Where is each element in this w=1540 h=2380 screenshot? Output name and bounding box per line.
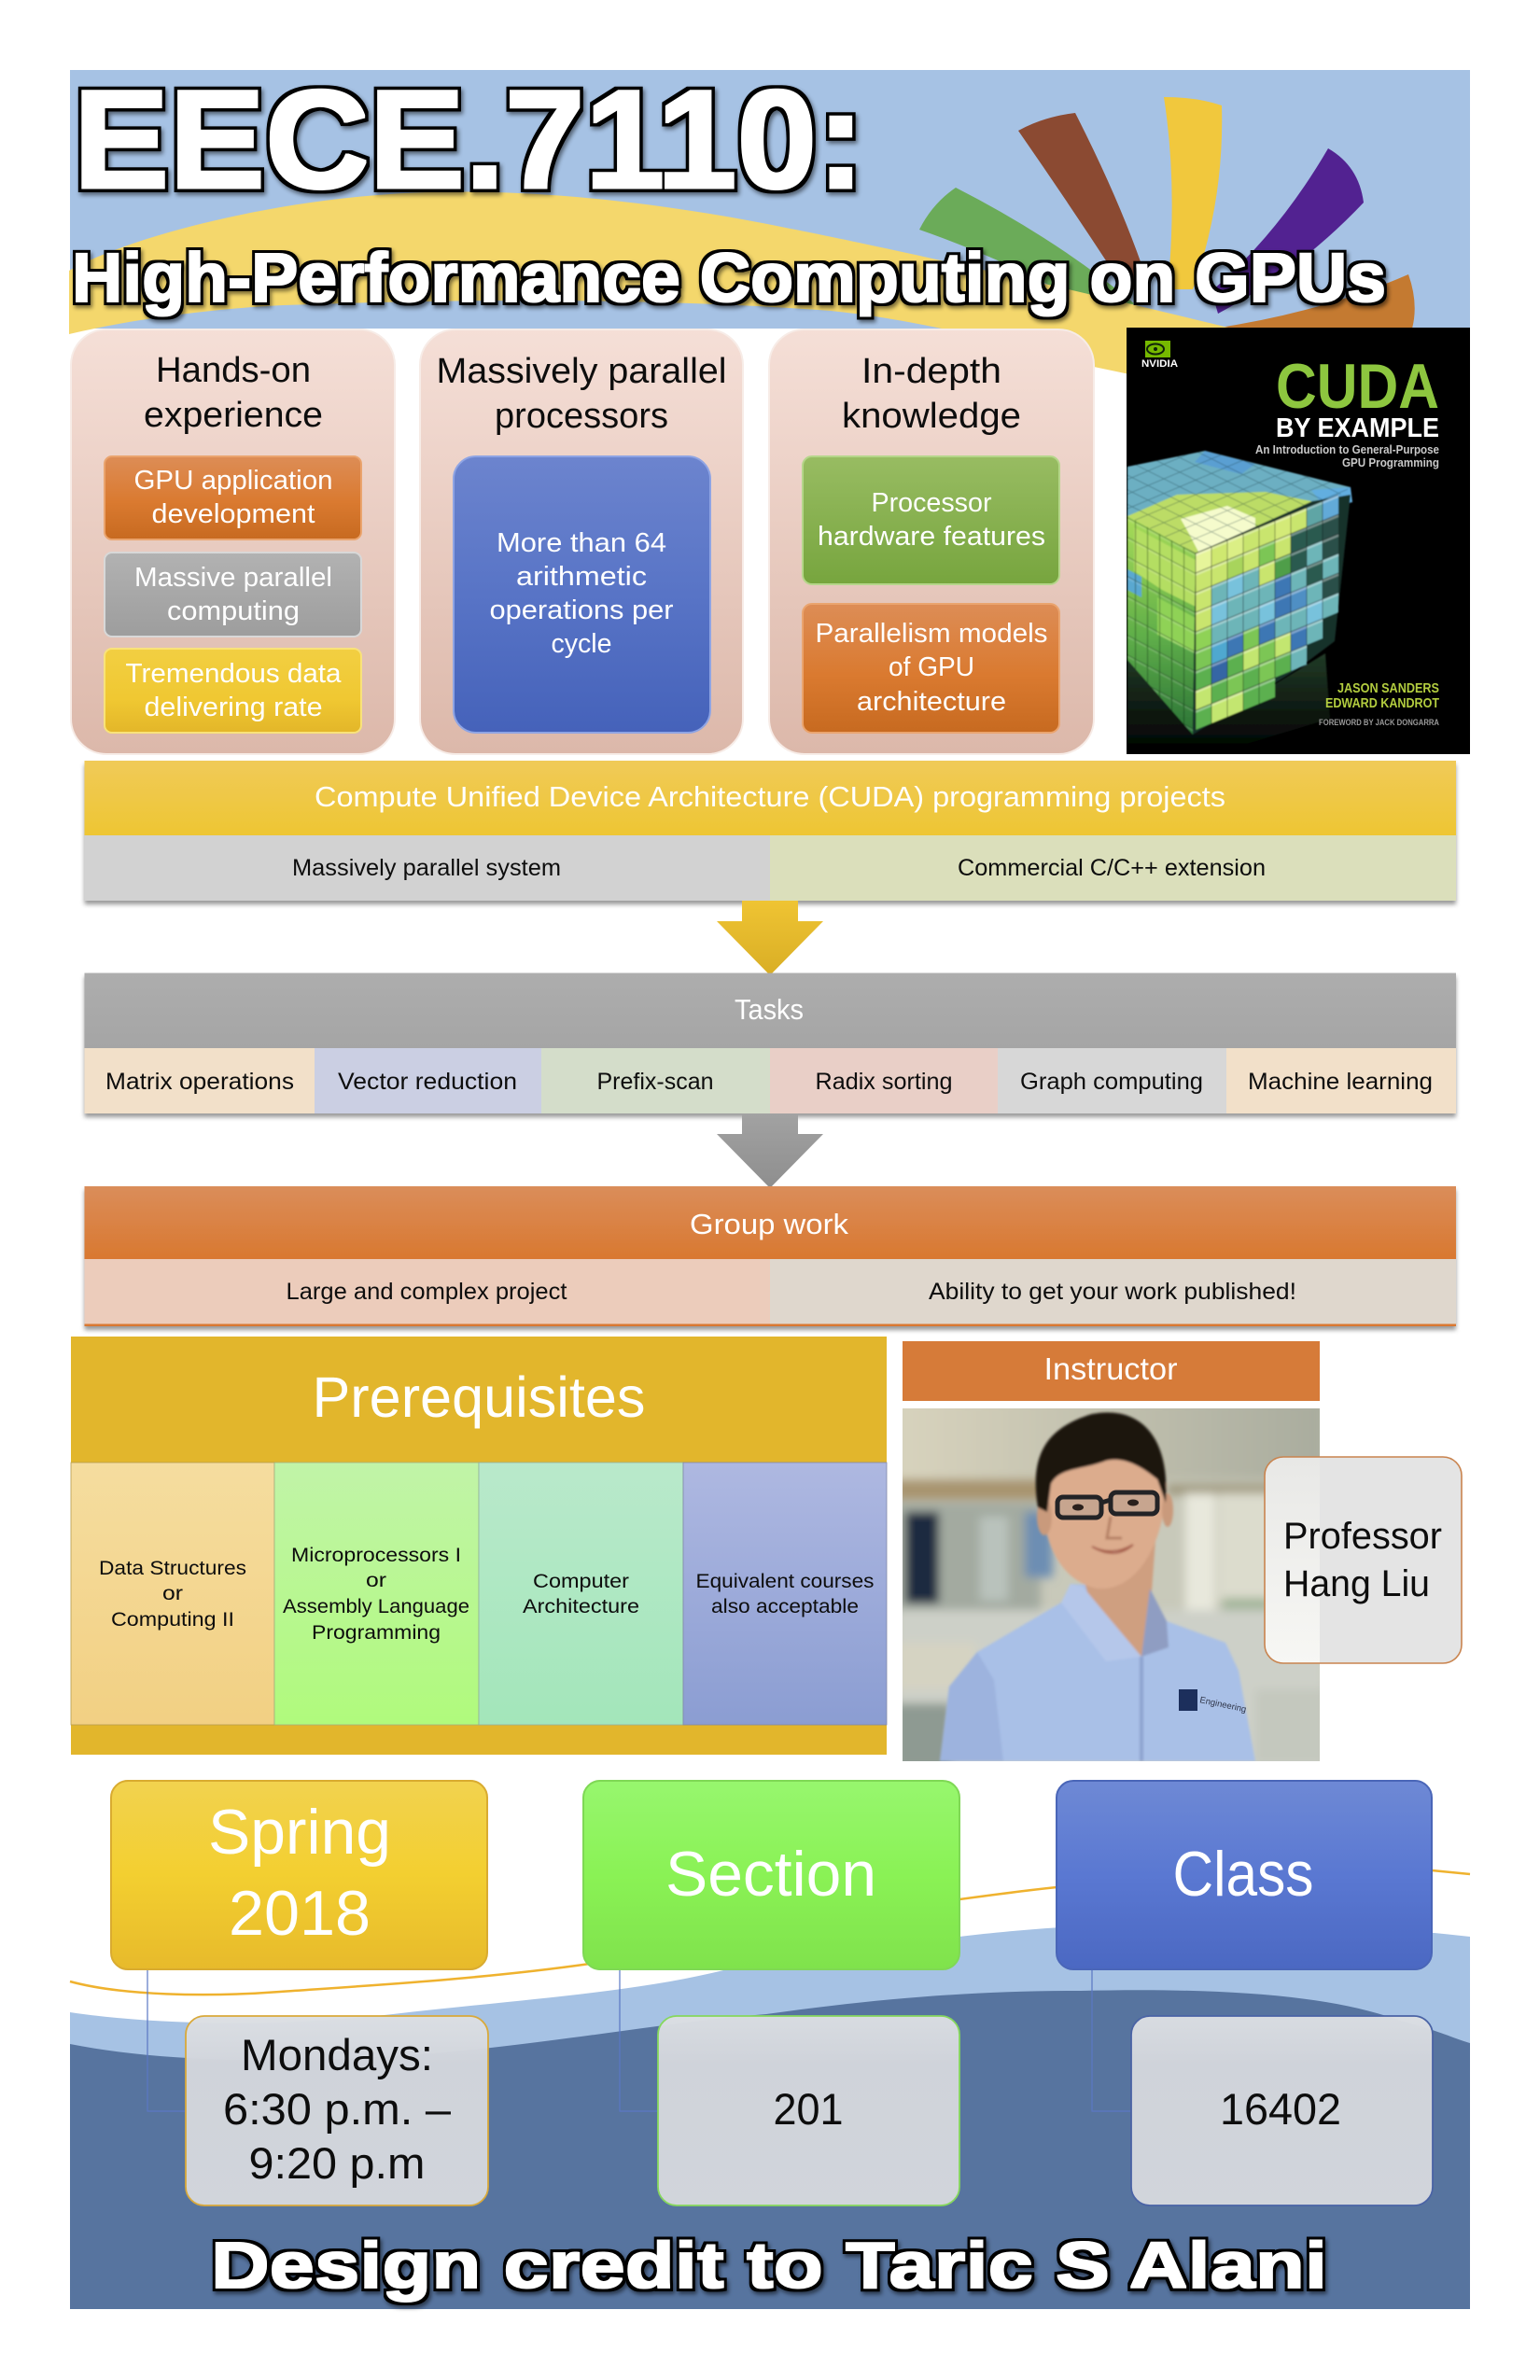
cell: equivalent courses also acceptable <box>683 1463 887 1725</box>
glasses <box>1057 1492 1157 1518</box>
arrow: to tasks <box>717 901 823 975</box>
box: more than 64 arithmetic operations: operations per <box>489 595 674 625</box>
petal: orange <box>1213 274 1415 329</box>
band: CUDA programming projects: Commercial C/C++ extension <box>958 855 1266 881</box>
box: section <box>583 1781 959 1969</box>
book authors: FOREWORD BY JACK DONGARRA <box>1319 718 1439 727</box>
cell: computer architecture: Architecture <box>523 1595 639 1617</box>
box: meeting time: Mondays: <box>241 2030 433 2079</box>
shirt logo <box>1179 1689 1247 1715</box>
box: massive parallel computing: Massive parallel <box>134 563 332 593</box>
panel: prerequisites <box>71 1337 887 1755</box>
box: class <box>1057 1781 1432 1969</box>
book title: GPU Programming <box>1342 455 1439 469</box>
box: section number: 201 <box>773 2084 844 2134</box>
box: parallelism models of GPU architecture <box>803 604 1059 733</box>
box: parallelism models of GPU architecture: architecture <box>857 687 1006 717</box>
book title: BY EXAMPLE <box>1276 413 1439 443</box>
heading: massively parallel processors: processors <box>495 397 668 436</box>
box: massive parallel computing <box>105 553 361 637</box>
cell: microprocessors I or assembly language programming: Programming <box>312 1621 441 1644</box>
box: more than 64 arithmetic operations: arithmetic <box>516 562 647 592</box>
main title: EECE.7110: <box>73 61 865 217</box>
box: section: Section <box>665 1839 876 1910</box>
instructor heading <box>903 1341 1320 1401</box>
box: class number <box>1131 2016 1433 2205</box>
top header background <box>69 70 1470 375</box>
band: group work: Group work <box>690 1208 849 1240</box>
heading: massively parallel processors: Massively parallel <box>437 352 726 391</box>
cell: computer architecture <box>479 1463 683 1725</box>
heading: hands-on experience <box>144 351 323 435</box>
box: processor hardware features: hardware features <box>818 522 1045 552</box>
shirt logo: Engineering <box>1198 1695 1247 1715</box>
book authors: EDWARD KANDROT <box>1325 695 1439 711</box>
band: tasks: Graph computing <box>1020 1069 1203 1095</box>
heading: hands-on experience: experience <box>144 396 323 435</box>
book cover: CUDA by Example <box>1127 328 1470 754</box>
bottom wave background <box>70 1870 1470 2309</box>
box: tremendous data delivering rate: Tremendous data <box>125 659 342 689</box>
box: more than 64 arithmetic operations <box>454 456 710 733</box>
cell: data structures or computing II: Data Structures <box>99 1557 246 1579</box>
book title <box>1255 351 1439 469</box>
book title: CUDA <box>1276 351 1439 422</box>
heading: in-depth knowledge <box>842 352 1021 436</box>
heading: in-depth knowledge: In-depth <box>861 352 1001 391</box>
band: CUDA programming projects <box>84 761 1456 901</box>
yellow wave <box>69 192 1232 375</box>
band: tasks: Radix sorting <box>816 1069 952 1095</box>
box: meeting time: 9:20 p.m <box>248 2138 426 2188</box>
instructor photo <box>896 1400 1325 1769</box>
icon: NVIDIA logo <box>1141 341 1178 370</box>
panel: in-depth knowledge <box>769 329 1094 754</box>
book authors: JASON SANDERS <box>1337 680 1439 696</box>
box: spring 2018 <box>111 1781 487 1969</box>
book authors <box>1319 680 1439 727</box>
band: group work: Large and complex project <box>286 1279 567 1305</box>
cell: microprocessors I or assembly language programming: or <box>366 1569 386 1591</box>
band: tasks: Vector reduction <box>338 1069 517 1095</box>
heading: prerequisites: Prerequisites <box>312 1365 646 1429</box>
cell: equivalent courses also acceptable: also acceptable <box>711 1595 859 1617</box>
box: processor hardware features <box>803 456 1059 584</box>
professor name card <box>1265 1457 1462 1663</box>
box: more than 64 arithmetic operations: cycle <box>551 629 612 659</box>
design credit: Design credit to Taric S Alani <box>211 2229 1327 2302</box>
arrow: to group work <box>717 1113 823 1188</box>
box: class: Class <box>1172 1839 1314 1910</box>
cell: microprocessors I or assembly language programming <box>274 1463 479 1725</box>
heading: in-depth knowledge: knowledge <box>842 397 1021 436</box>
band: CUDA programming projects: Compute Unified Device Architecture (CUDA) programming projects <box>315 780 1225 813</box>
box: processor hardware features: Processor <box>872 488 992 518</box>
box: more than 64 arithmetic operations: More than 64 <box>497 528 666 558</box>
heading: hands-on experience: Hands-on <box>156 351 311 390</box>
cell: computer architecture: Computer <box>533 1570 629 1592</box>
box: GPU application development: GPU application <box>134 466 332 496</box>
cell: microprocessors I or assembly language programming: Assembly Language <box>283 1595 469 1617</box>
petal: brown <box>1018 113 1150 289</box>
band: tasks <box>84 973 1456 1113</box>
box: meeting time <box>186 2016 488 2205</box>
band: tasks: Tasks <box>735 993 804 1026</box>
professor name card: Professor <box>1283 1516 1442 1557</box>
right face blocks: row 0 <box>1196 547 1211 573</box>
box: parallelism models of GPU architecture: Parallelism models <box>816 619 1047 649</box>
petal: green <box>919 188 1134 322</box>
instructor heading: Instructor <box>1043 1351 1178 1386</box>
book title: An Introduction to General-Purpose <box>1255 442 1439 456</box>
cell: equivalent courses also acceptable: Equivalent courses <box>696 1570 874 1592</box>
heading: massively parallel processors <box>437 352 726 436</box>
subtitle: High-Performance Computing on GPUs <box>72 239 1386 316</box>
band: CUDA programming projects: Massively parallel system <box>292 855 561 881</box>
band: group work <box>84 1186 1456 1326</box>
panel: hands-on experience <box>71 329 395 754</box>
panel: massively parallel processors <box>420 329 743 754</box>
cell: data structures or computing II <box>71 1463 274 1725</box>
person <box>940 1412 1255 1761</box>
band: tasks: Matrix operations <box>105 1069 294 1095</box>
band: tasks: Machine learning <box>1248 1069 1433 1095</box>
box: spring 2018: 2018 <box>229 1878 371 1949</box>
cell: data structures or computing II: or <box>162 1582 183 1604</box>
box: spring 2018: Spring <box>208 1797 391 1868</box>
connector lines <box>147 1969 1131 2111</box>
cell: microprocessors I or assembly language programming: Microprocessors I <box>291 1544 461 1566</box>
box: massive parallel computing: computing <box>167 596 300 626</box>
icon: NVIDIA logo: NVIDIA <box>1141 358 1178 370</box>
box: class number: 16402 <box>1220 2084 1341 2134</box>
petal: purple <box>1211 148 1364 314</box>
petal: yellow <box>1164 97 1222 289</box>
box: section number <box>658 2016 959 2205</box>
box: meeting time: 6:30 p.m. – <box>223 2084 452 2134</box>
box: GPU application development: development <box>151 499 315 529</box>
box: parallelism models of GPU architecture: of GPU <box>889 652 974 682</box>
box: tremendous data delivering rate: delivering rate <box>144 693 323 722</box>
box: tremendous data delivering rate <box>105 649 361 733</box>
box: GPU application development <box>105 456 361 539</box>
band: group work: Ability to get your work published! <box>929 1279 1296 1305</box>
professor name card: Hang Liu <box>1283 1563 1430 1604</box>
cube illustration <box>1127 451 1352 754</box>
cell: data structures or computing II: Computing II <box>111 1608 234 1631</box>
band: tasks: Prefix-scan <box>597 1069 713 1095</box>
